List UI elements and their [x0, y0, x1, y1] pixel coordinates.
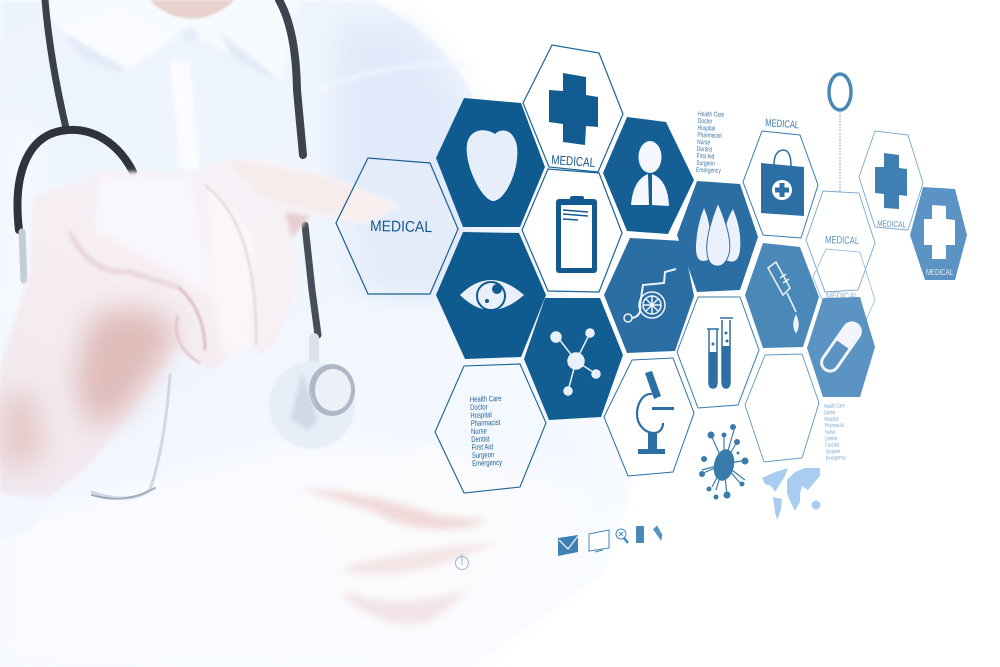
- hexagon: molecule: [524, 298, 623, 420]
- icon: virus: [699, 424, 748, 500]
- icon: capsule: [816, 318, 866, 376]
- icon: cross: [549, 73, 598, 145]
- gloved pointing hand: [0, 157, 400, 540]
- neck skin: [150, 0, 235, 19]
- text list: faded health care terms: First Aid: [825, 442, 840, 449]
- text list: health care terms: Surgeon: [696, 160, 715, 168]
- hexagon: empty: [745, 354, 819, 462]
- label: medical: MEDICAL: [551, 152, 596, 170]
- text list: health care terms: Health Care: [470, 395, 502, 404]
- text list: health care terms: Doctor: [698, 118, 712, 126]
- icon: cross: [924, 205, 955, 259]
- hexagon grid: [336, 45, 967, 570]
- photo: doctor in white coat: [0, 0, 632, 667]
- hexagon: health care list: [435, 364, 546, 493]
- hexagon: heart: [436, 98, 545, 227]
- label: medical: MEDICAL: [370, 218, 433, 236]
- text list: health care terms: Dentist: [697, 146, 712, 154]
- hexagon: person: [603, 117, 694, 234]
- text list: faded health care terms: Dentist: [825, 435, 838, 443]
- shirt collar: [40, 0, 300, 170]
- hexagon: pill: [807, 297, 875, 397]
- hexagon: medical cross: [523, 45, 623, 172]
- text list: faded health care terms: Nurse: [825, 429, 836, 436]
- icon: first aid kit: [761, 150, 804, 216]
- icon: envelope: [558, 535, 578, 556]
- text list: health care terms: Pharmacist: [697, 132, 722, 140]
- text list: health care terms: Dentist: [471, 436, 490, 444]
- hexagon: eye: [436, 232, 546, 359]
- icon: tool: [653, 526, 662, 540]
- hexagon: syringe: [745, 243, 819, 348]
- hexagon: medical pointer: [336, 158, 458, 294]
- text list: health care terms: Pharmacist: [471, 419, 500, 428]
- text list: faded health care terms: Surgeon: [825, 448, 841, 456]
- hexagon: wheelchair: [604, 238, 694, 353]
- text list: health care terms: Doctor: [470, 404, 488, 412]
- text list: faded health care terms: Doctor: [824, 409, 836, 417]
- hexagon: small cross outline: [859, 131, 923, 230]
- label: medical: MEDICAL: [877, 218, 907, 230]
- hexagon: clipboard: [522, 169, 622, 292]
- icon: syringe: [768, 262, 798, 332]
- text list: health care terms: Emergency: [696, 167, 721, 175]
- icon: test tubes: [707, 318, 733, 388]
- text list: faded health care terms: Hospital: [824, 416, 839, 423]
- icon: doctor: [631, 141, 669, 206]
- text list: health care terms: Nurse: [697, 139, 711, 147]
- icon: water drops: [696, 203, 740, 266]
- gloved lower hand: [285, 445, 520, 630]
- circle marker with dotted line: [829, 74, 851, 192]
- text list: health care terms: Hospital: [697, 125, 715, 133]
- hexagon: microscope: [604, 358, 694, 476]
- hexagon: first aid kit: [743, 117, 818, 238]
- text list: faded health care terms: Health Care: [824, 403, 845, 410]
- icon: world map: [762, 468, 820, 520]
- hexagon: solid cross: [910, 187, 967, 280]
- text list: health care terms: Health Care: [698, 111, 725, 119]
- text list: faded health care terms: Pharmacist: [825, 422, 845, 430]
- text list: health care terms: Nurse: [471, 428, 487, 436]
- text list: faded health care terms: Emergency: [826, 455, 846, 462]
- stethoscope chest piece: [269, 361, 355, 449]
- icon: heart: [467, 130, 517, 201]
- label: medical: MEDICAL: [765, 117, 800, 131]
- icon: wheelchair: [624, 269, 676, 322]
- stethoscope tubing: [18, 0, 318, 499]
- label: medical clipped: MEDICAL: [826, 291, 858, 302]
- hexagon: medical outline behind: [813, 249, 875, 320]
- icon: eye: [460, 280, 524, 310]
- text list: health care terms: First Aid: [471, 444, 493, 452]
- icon: magnifier: [616, 529, 628, 543]
- icon: monitor: [589, 530, 609, 552]
- hexagon: test tubes: [677, 297, 759, 408]
- icon: power button: [456, 554, 468, 570]
- white coat: [0, 0, 632, 667]
- icon: phone handset: [636, 526, 644, 543]
- icon: clipboard: [556, 196, 597, 273]
- text list: health care terms: Emergency: [472, 459, 503, 468]
- hexagon: drops: [677, 181, 758, 292]
- icon: cross: [875, 153, 907, 209]
- text list: health care terms: Surgeon: [472, 452, 494, 460]
- text list: health care terms: Hospital: [470, 412, 492, 420]
- label: medical: MEDICAL: [825, 234, 859, 247]
- icon: microscope: [637, 371, 674, 454]
- label: medical: MEDICAL: [926, 267, 953, 277]
- text list: health care terms: First Aid: [696, 153, 714, 161]
- icon: molecule: [551, 329, 600, 395]
- hexagon: medical outline: [806, 191, 875, 292]
